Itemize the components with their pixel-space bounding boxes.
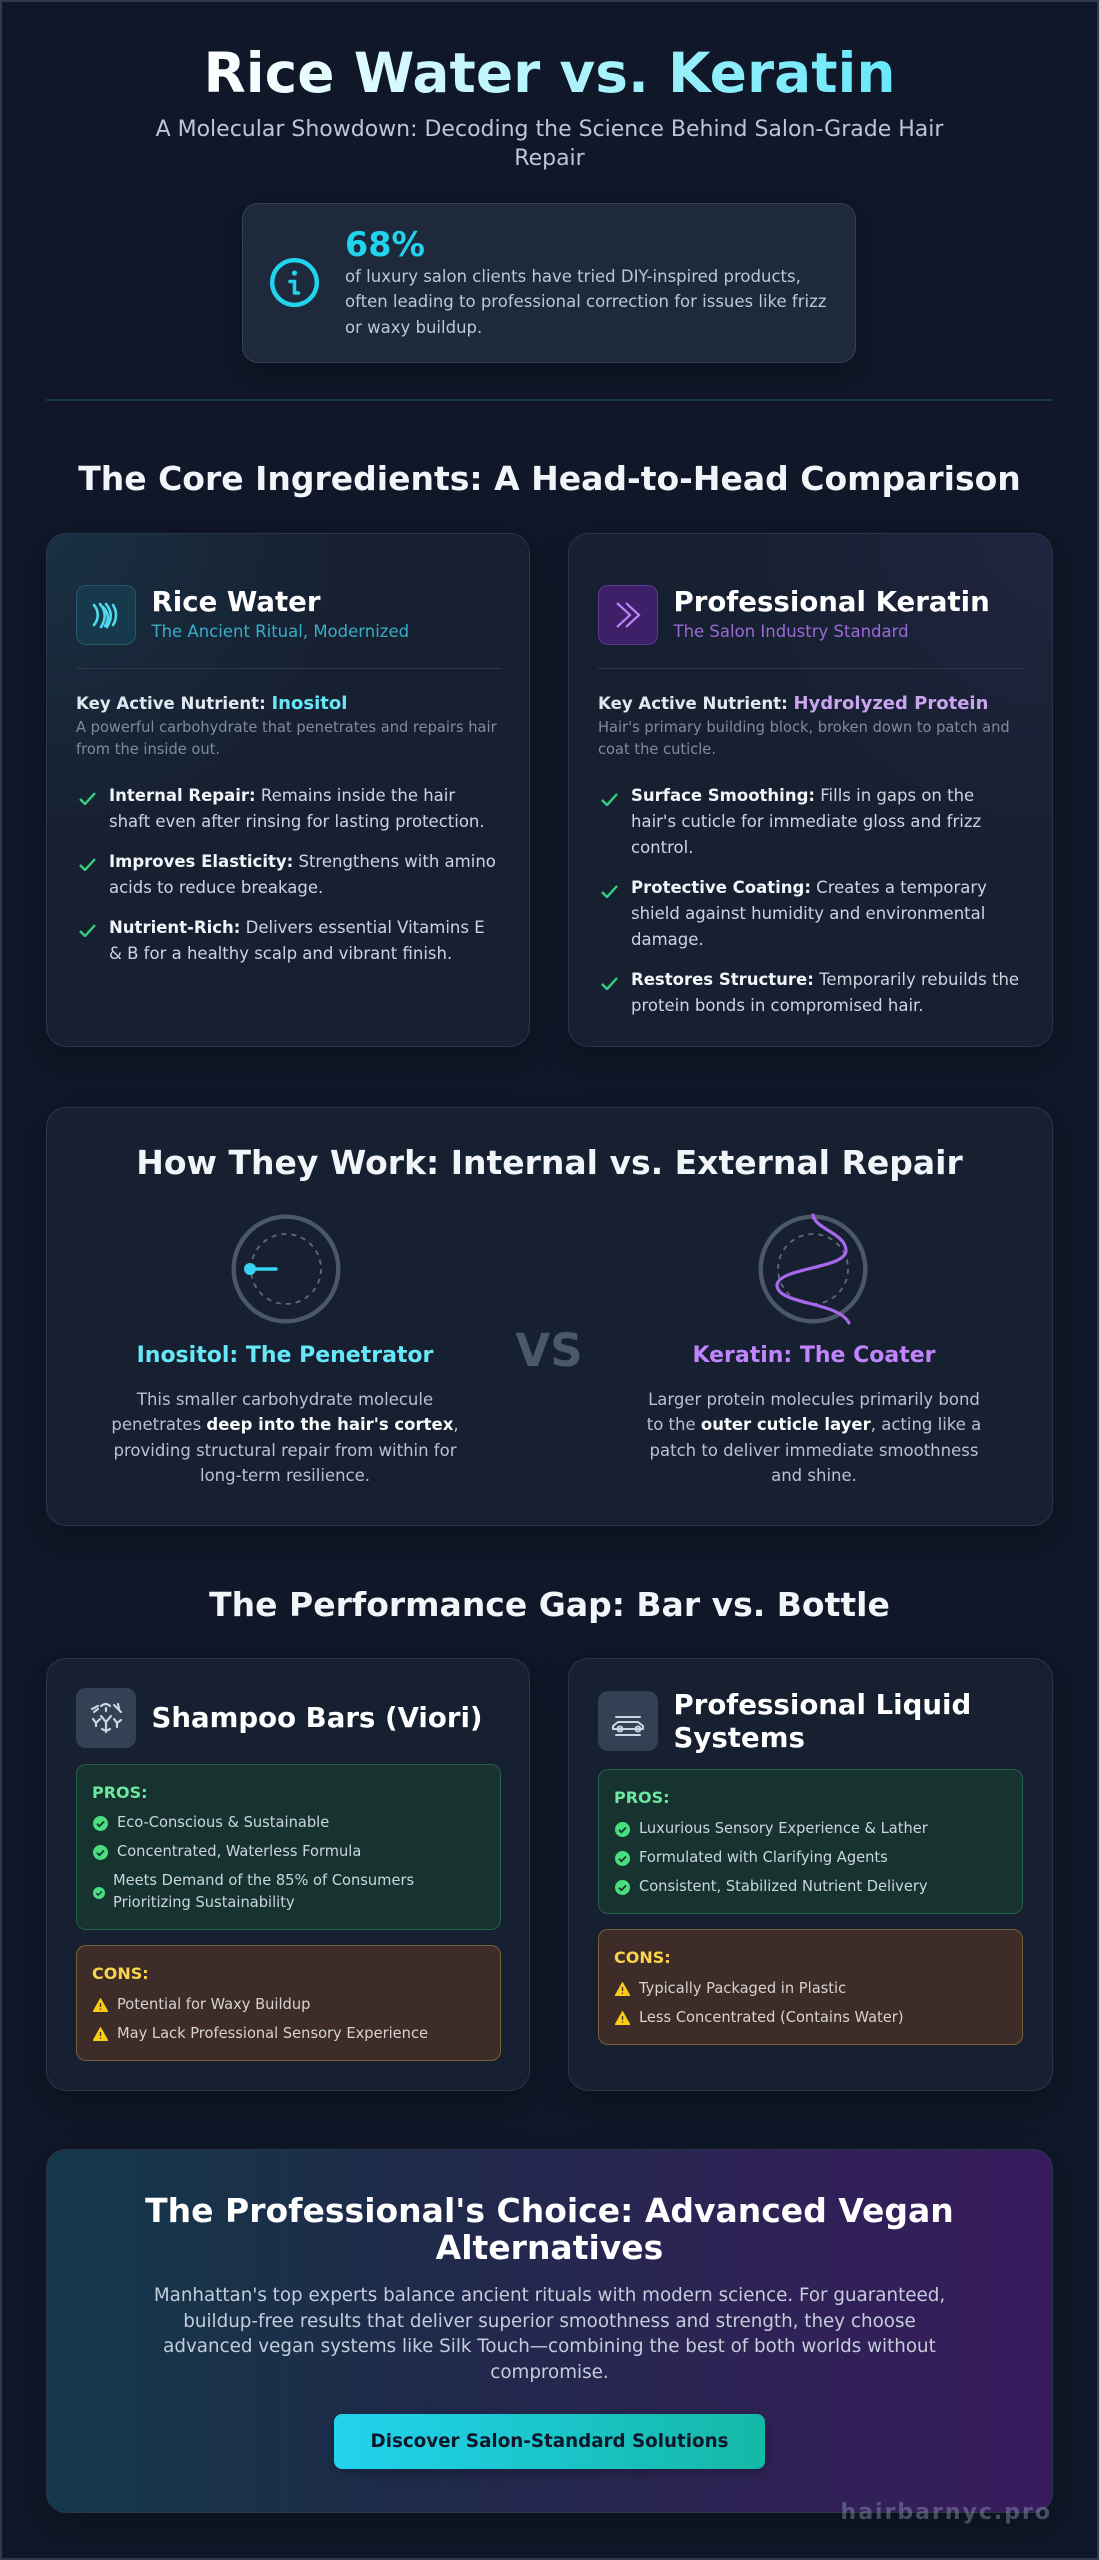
diagram: keratin coating <box>758 1213 868 1325</box>
card title: Professional Keratin <box>674 585 990 618</box>
card tagline: The Salon Industry Standard <box>674 622 909 641</box>
con item: Potential for Waxy Buildup <box>117 1996 310 2013</box>
pro item: Prioritizing Sustainability <box>113 1894 295 1911</box>
benefit: protective coating: shield against humidity and environmental <box>631 904 985 923</box>
con item: May Lack Professional Sensory Experience <box>117 2025 428 2042</box>
text: keratin explanation: Larger protein molecules primarily bond <box>648 1390 980 1408</box>
icon: info circle <box>270 258 319 307</box>
statistic text: or waxy buildup. <box>345 318 482 337</box>
cons box <box>76 1945 501 2061</box>
subtitle: A Molecular Showdown: Decoding the Science Behind Salon-Grade Hair <box>156 117 943 142</box>
subtitle <box>156 117 944 171</box>
heading: performance gap: The Performance Gap: Bar vs. Bottle <box>209 1585 890 1624</box>
benefit: restores structure: Restores Structure: Temporarily rebuilds the <box>631 970 1019 989</box>
button: discover solutions: Discover Salon-Standard Solutions <box>371 2431 728 2452</box>
text: inositol explanation <box>111 1390 459 1485</box>
text: keratin explanation: and shine. <box>771 1466 857 1485</box>
benefit: protective coating: damage. <box>631 930 704 949</box>
pro item: Consistent, Stabilized Nutrient Delivery <box>639 1878 928 1895</box>
key nutrient: Key Active Nutrient: Inositol <box>76 693 347 714</box>
label: inositol: Inositol: The Penetrator <box>137 1343 433 1368</box>
icon: shampoo bar molecule <box>76 1688 136 1748</box>
vs label: VS <box>515 1324 583 1377</box>
panel: shampoo bars <box>46 1658 530 2091</box>
icon: liquid system <box>598 1691 658 1751</box>
text: inositol explanation: long-term resilience. <box>200 1466 370 1485</box>
pros label: PROS: <box>614 1788 670 1806</box>
benefit: protective coating: Protective Coating: Creates a temporary <box>631 878 987 897</box>
benefit: surface smoothing: hair's cuticle for immediate gloss and frizz <box>631 812 981 831</box>
key nutrient: Key Active Nutrient: Hydrolyzed Protein <box>598 693 988 714</box>
cons label: CONS: <box>614 1948 671 1966</box>
benefit: internal repair: shaft even after rinsing for lasting protection. <box>109 812 485 831</box>
benefit: internal repair: Internal Repair: Remains inside the hair <box>109 786 455 805</box>
card title <box>674 1688 971 1754</box>
pro item: Eco-Conscious & Sustainable <box>117 1814 329 1831</box>
nutrient description: A powerful carbohydrate that penetrates and repairs hair <box>76 719 497 736</box>
watermark: hairbarnyc.pro <box>841 2500 1052 2525</box>
benefit: surface smoothing: control. <box>631 838 693 857</box>
diagram: inositol penetrating <box>232 1214 340 1324</box>
panel: 68% statistic <box>242 203 856 363</box>
text: call to action copy: advanced vegan systems like Silk Touch—combining the best of both worlds without <box>163 2336 936 2357</box>
benefit: improves elasticity <box>79 852 496 897</box>
heading: professional's choice: The Professional's Choice: Advanced Vegan <box>145 2191 954 2230</box>
label: keratin: Keratin: The Coater <box>692 1343 936 1368</box>
cons label: CONS: <box>92 1964 149 1982</box>
text: inositol explanation: This smaller carbohydrate molecule <box>137 1390 433 1408</box>
pro item <box>93 1872 414 1911</box>
panel: professional's choice call to action <box>46 2149 1053 2513</box>
benefit: improves elasticity: acids to reduce breakage. <box>109 878 323 897</box>
nutrient description <box>76 719 497 758</box>
panel: professional keratin <box>568 533 1053 1047</box>
card title: Rice Water <box>152 585 320 618</box>
panel: rice water <box>46 533 530 1047</box>
text: call to action copy <box>154 2285 945 2383</box>
statistic text <box>345 266 826 337</box>
card title: Systems <box>674 1721 805 1754</box>
text: call to action copy: buildup-free results that deliver superior smoothness and strength, they choose <box>183 2311 916 2332</box>
con item: Less Concentrated (Contains Water) <box>639 2009 904 2026</box>
benefit: restores structure: protein bonds in compromised hair. <box>631 996 924 1015</box>
benefit: surface smoothing <box>601 786 981 857</box>
benefit: nutrient-rich: Nutrient-Rich: Delivers essential Vitamins E <box>109 918 485 937</box>
card title: Shampoo Bars (Viori) <box>152 1701 483 1734</box>
benefit: improves elasticity: Improves Elasticity: Strengthens with amino <box>109 852 496 871</box>
pro item: Formulated with Clarifying Agents <box>639 1849 888 1866</box>
heading: how they work: How They Work: Internal vs. External Repair <box>136 1143 963 1182</box>
subtitle: Repair <box>514 146 585 171</box>
text: keratin explanation <box>647 1390 981 1485</box>
statistic number: 68% <box>345 225 425 264</box>
statistic text: of luxury salon clients have tried DIY-inspired products, <box>345 266 801 286</box>
con item: Typically Packaged in Plastic <box>639 1980 846 1997</box>
text: keratin explanation: patch to deliver immediate smoothness <box>650 1441 978 1460</box>
benefit: internal repair <box>79 786 485 831</box>
benefit: restores structure <box>601 970 1019 1015</box>
icon: rice water waves <box>76 585 136 645</box>
heading: core ingredients: The Core Ingredients: A Head-to-Head Comparison <box>78 459 1021 498</box>
pros label: PROS: <box>92 1782 148 1802</box>
benefit: nutrient-rich <box>79 918 485 963</box>
card tagline: The Ancient Ritual, Modernized <box>152 622 409 641</box>
card title: Professional Liquid <box>674 1688 971 1721</box>
title: Rice Water vs. Keratin <box>203 41 896 105</box>
panel: professional liquid systems <box>568 1658 1053 2091</box>
text: inositol explanation: penetrates deep into the hair's cortex, <box>111 1415 459 1434</box>
nutrient description: Hair's primary building block, broken down to patch and <box>598 719 1010 736</box>
pro item: Luxurious Sensory Experience & Lather <box>639 1820 928 1837</box>
heading: professional's choice: Alternatives <box>436 2228 663 2267</box>
heading: professional's choice <box>145 2191 954 2267</box>
benefit: protective coating <box>601 878 987 949</box>
text: call to action copy: compromise. <box>490 2362 609 2383</box>
pro item: Concentrated, Waterless Formula <box>117 1843 361 1860</box>
pros box <box>76 1764 501 1930</box>
statistic text: often leading to professional correction for issues like frizz <box>345 292 826 311</box>
button: discover solutions <box>334 2414 765 2469</box>
pro item: Meets Demand of the 85% of Consumers <box>113 1872 414 1889</box>
icon: keratin chevrons <box>598 585 658 645</box>
nutrient description <box>598 719 1010 758</box>
benefit: surface smoothing: Surface Smoothing: Fills in gaps on the <box>631 786 974 805</box>
text: inositol explanation: providing structural repair from within for <box>114 1441 456 1460</box>
text: keratin explanation: to the outer cuticle layer, acting like a <box>647 1415 981 1434</box>
cons box <box>598 1929 1023 2045</box>
nutrient description: coat the cuticle. <box>598 741 716 758</box>
benefit: nutrient-rich: & B for a healthy scalp and vibrant finish. <box>109 944 452 963</box>
pros box <box>598 1769 1023 1914</box>
panel: how they work <box>46 1107 1053 1526</box>
text: call to action copy: Manhattan's top experts balance ancient rituals with modern science. For guaranteed, <box>154 2285 945 2306</box>
nutrient description: from the inside out. <box>76 741 220 758</box>
